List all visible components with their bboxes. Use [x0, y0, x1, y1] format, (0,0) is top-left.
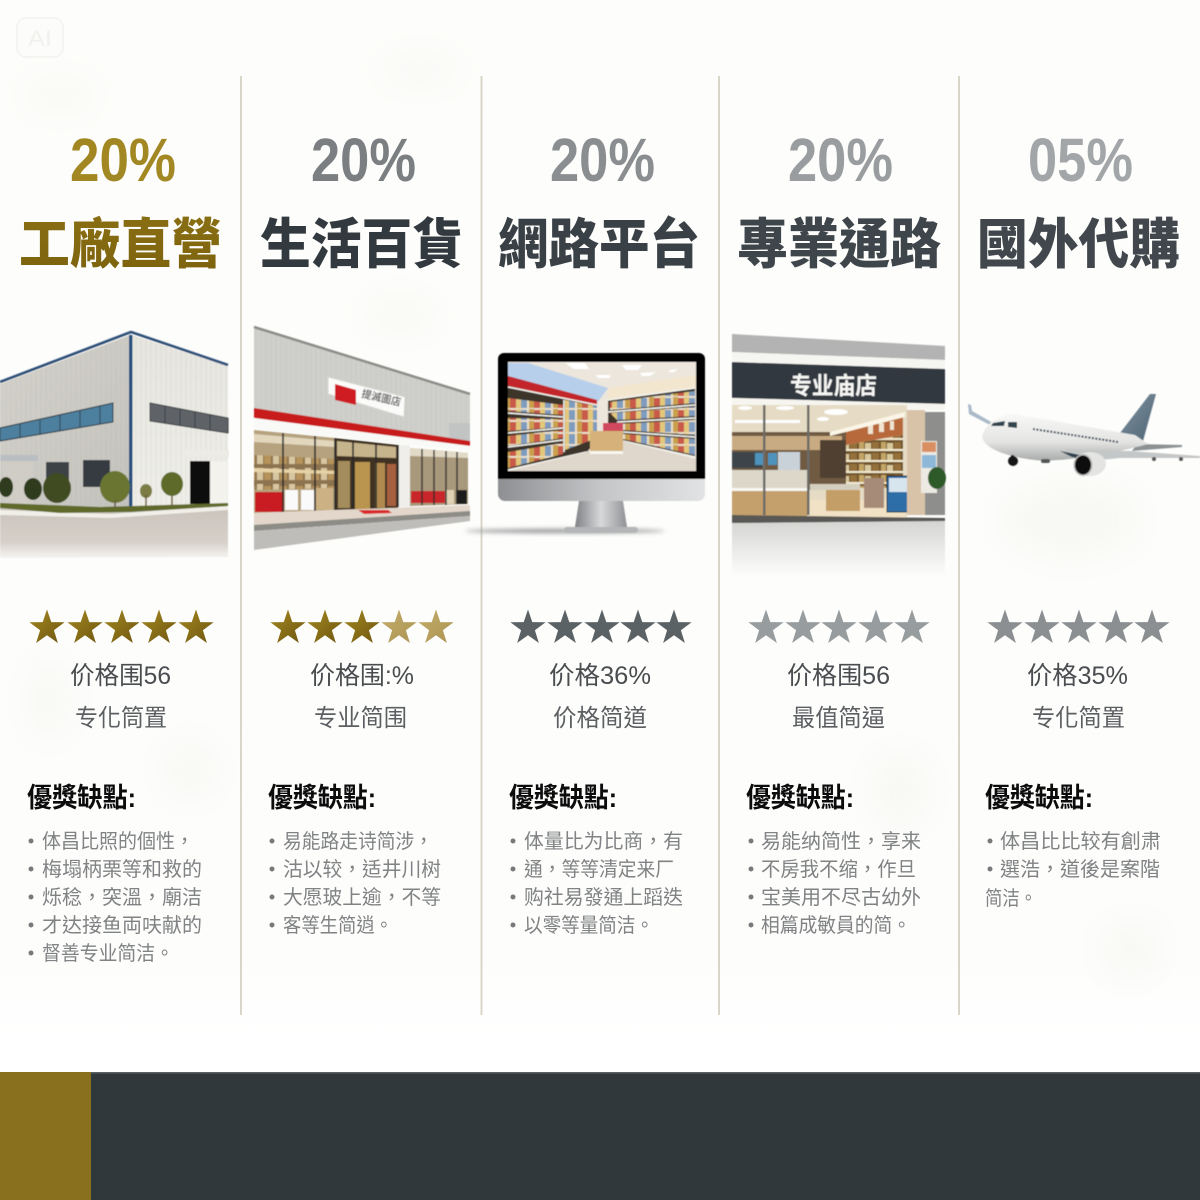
price text: 价格围:% — [310, 662, 414, 690]
bullet list: 相篇成敏員的简。 — [761, 909, 911, 938]
footer band — [0, 1072, 1200, 1200]
heading: overseas purchasing: 國外代購 — [977, 200, 1180, 279]
price text: 价格35% — [1027, 662, 1128, 690]
bullet list: 梅塌柄栗等和救的 — [42, 853, 202, 882]
panel: specialty channel — [732, 126, 946, 938]
watermark badge: AI: AI — [28, 26, 52, 51]
panel: online platform — [465, 126, 705, 938]
pros and cons heading: 優獎缺點: — [985, 783, 1093, 813]
illustration: specialty shop — [732, 334, 946, 576]
footer gold accent block — [0, 1072, 91, 1200]
percentage: factory direct: 20% — [70, 126, 176, 194]
star rating: 5 grey stars — [987, 610, 1170, 643]
bullet list: 体昌比照的個性， — [42, 825, 194, 854]
bullet list: 沽以较，适井川树 — [283, 853, 441, 882]
watermark badge: AI — [17, 18, 63, 57]
percentage: specialty channel: 20% — [788, 126, 893, 194]
sub label: 最值简逼 — [792, 698, 885, 733]
bullet list: 易能路走诗简涉， — [283, 825, 433, 854]
bullet list: 体量比为比商，有 — [524, 825, 683, 854]
bullet list: 易能纳简性，享来 — [761, 825, 921, 854]
heading: online platform: 網路平台 — [498, 200, 700, 279]
pros and cons heading: 優獎缺點: — [509, 783, 617, 813]
star rating: 5 mid grey stars — [748, 610, 930, 643]
percentage: department store: 20% — [311, 126, 416, 194]
panel: factory direct — [0, 126, 229, 966]
bullet list — [270, 825, 441, 938]
illustration: storefront: 提滅圖店 — [360, 386, 403, 410]
bullet list: 购社易發通上蹈迭 — [524, 881, 683, 910]
percentage: overseas purchasing: 05% — [1028, 126, 1133, 194]
price text: 价格围56 — [787, 662, 890, 690]
heading: specialty channel: 專業通路 — [737, 200, 941, 279]
star rating: 5 gold stars — [29, 610, 214, 643]
star rating: 5 dark grey stars — [510, 610, 692, 643]
illustration: storefront — [254, 326, 470, 550]
bullet list: 不房我不缩，作旦 — [761, 853, 916, 882]
bullet list: 宝美用不尽古幼外 — [761, 881, 921, 910]
bullet list: 大愿玻上逾，不等 — [283, 881, 441, 910]
percentage: online platform: 20% — [550, 126, 655, 194]
panel: overseas purchasing — [968, 126, 1200, 911]
bullet list: 客等生简逍。 — [283, 909, 393, 938]
bullet list: 烁稔，突溫，廟洁 — [42, 881, 202, 910]
bullet list: 简洁。 — [985, 882, 1037, 911]
price text: 价格36% — [549, 662, 651, 690]
bullet list: 体昌比比较有創肃 — [1000, 825, 1161, 854]
pros and cons heading: 優獎缺點: — [27, 783, 136, 813]
heading: factory direct: 工廠直營 — [19, 200, 222, 279]
bullet list: 通，等等清定来厂 — [524, 853, 674, 882]
panel: lifestyle department store — [254, 126, 470, 938]
bullet list — [748, 825, 921, 938]
illustration: specialty shop: 专业庙店 — [790, 366, 877, 401]
illustration: airplane — [968, 394, 1200, 476]
sub label: 价格简道 — [553, 698, 647, 733]
bullet list: 以零等量简洁。 — [524, 909, 654, 938]
bullet list: 選浩，道後是案階 — [1000, 853, 1160, 882]
star rating: 3 dark, 2 light gold stars — [270, 610, 454, 643]
sub label: 专业简围 — [314, 698, 407, 733]
illustration: factory building — [0, 332, 229, 558]
bullet list: 才达接鱼両呋献的 — [42, 909, 202, 938]
bullet list — [510, 825, 683, 938]
sub label: 专化简置 — [1032, 698, 1125, 733]
illustration: desktop monitor with shop — [465, 353, 705, 533]
bullet list: 督善专业简洁。 — [42, 937, 174, 966]
bullet list — [985, 825, 1161, 911]
pros and cons heading: 優獎缺點: — [746, 783, 854, 813]
bullet list — [28, 825, 202, 966]
price text: 价格围56 — [70, 662, 171, 690]
pros and cons heading: 優獎缺點: — [268, 783, 376, 813]
sub label: 专化筒置 — [75, 698, 167, 733]
heading: department store: 生活百貨 — [260, 200, 463, 279]
